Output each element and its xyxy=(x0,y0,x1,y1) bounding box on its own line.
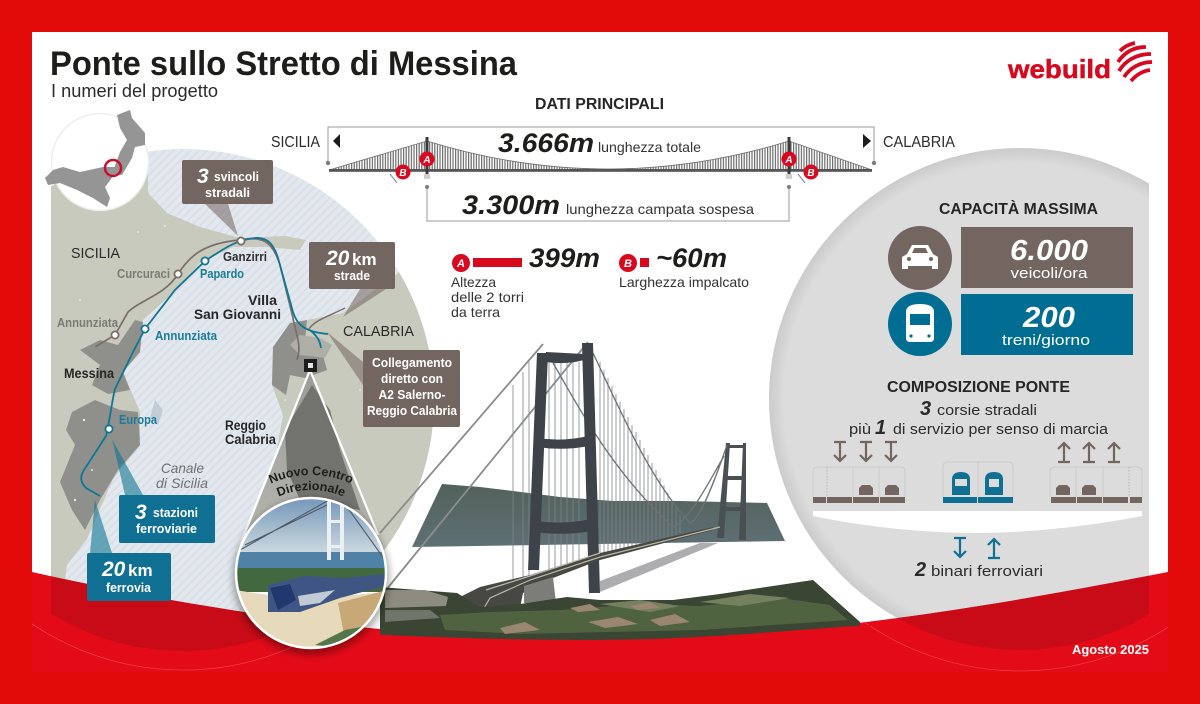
place names: Annunziata xyxy=(155,329,218,343)
stat: vehicles per hour xyxy=(961,227,1133,288)
road junctions xyxy=(111,237,245,339)
hangers xyxy=(513,362,680,588)
callout: Collegamento A2: diretto con xyxy=(381,371,443,386)
callout: 3 svincoli stradali: svincoli xyxy=(214,169,259,184)
callout: Collegamento A2 xyxy=(327,332,460,427)
stat: tower height: Altezza xyxy=(451,274,496,290)
arc label: Nuovo Centro Direzionale: Nuovo Centro xyxy=(268,466,352,484)
deck cross-section xyxy=(813,511,1142,533)
front cables xyxy=(380,342,588,590)
road spur towards A2 xyxy=(308,308,345,330)
icon: train xyxy=(888,292,952,356)
badges: B xyxy=(399,168,407,179)
darkened circles under band xyxy=(32,576,1168,672)
place names: Europa xyxy=(119,413,158,427)
webuild logo: webuild xyxy=(1007,54,1111,84)
text: railway tracks: binari ferroviari xyxy=(931,563,1043,580)
deck shadow on the sea xyxy=(600,543,718,592)
stat: deck width: ~60m xyxy=(656,243,727,273)
label: Calabria on map: CALABRIA xyxy=(343,323,414,340)
stat: trains per day: treni/giorno xyxy=(1002,332,1090,349)
text: lanes description: 3 xyxy=(920,398,931,420)
text: railway tracks: 2 xyxy=(914,559,926,581)
suspended cables and hangers xyxy=(329,141,427,170)
callout: 3 svincoli stradali: stradali xyxy=(205,185,250,200)
icon: car xyxy=(888,226,952,290)
stat: tower height: delle 2 torri xyxy=(451,289,524,305)
subtitle: I numeri del progetto xyxy=(51,81,218,101)
callout: Collegamento A2: A2 Salerno- xyxy=(378,387,446,402)
arrows: road direction down xyxy=(834,442,897,461)
lanes: left carriageway xyxy=(813,467,905,503)
callout: 3 svincoli stradali: 3 xyxy=(197,165,209,188)
lanes: railway xyxy=(943,462,1013,503)
locator map inset xyxy=(45,110,148,210)
label: Canale di Sicilia: di Sicilia xyxy=(156,475,208,491)
place names: Ganzirri xyxy=(223,250,267,264)
main bridge illustration xyxy=(380,342,860,646)
text: lanes description: corsie stradali xyxy=(937,402,1037,419)
callout: 3 stazioni ferroviarie: stazioni xyxy=(153,505,198,520)
label: Sicilia end: SICILIA xyxy=(271,134,320,151)
callout: 20km ferrovia: 20 xyxy=(101,558,126,581)
panel: gray capacity circle xyxy=(769,148,1149,618)
stat: trains per day: 200 xyxy=(1022,302,1075,334)
road route xyxy=(95,239,299,360)
callout: Collegamento A2: Collegamento xyxy=(372,355,452,370)
far hills xyxy=(412,484,785,547)
badges: A xyxy=(784,155,793,166)
arrows: road direction up xyxy=(1058,443,1120,462)
stat: vehicles per hour: 6.000 xyxy=(1010,235,1088,267)
stat: suspended span: lunghezza campata sospesa xyxy=(566,201,754,217)
place names: Reggio xyxy=(225,418,266,433)
text: lanes description: 1 xyxy=(875,417,886,439)
callout: 20km strade: strade xyxy=(334,268,370,283)
bridge deck xyxy=(460,527,713,608)
direction arrows xyxy=(333,134,340,148)
text: railway tracks xyxy=(914,559,1043,581)
main tower xyxy=(528,343,600,593)
stat: tower height: A xyxy=(456,258,465,270)
callout: 20km ferrovia: ferrovia xyxy=(106,580,152,595)
arrows: railway directions xyxy=(954,538,1000,558)
callout: 20km ferrovia: km xyxy=(128,561,153,580)
bridge elevation diagram xyxy=(326,127,876,221)
callout: 3 stazioni ferroviarie xyxy=(112,439,215,543)
stat: tower height: 399m xyxy=(529,243,600,273)
stat: suspended span: 3.300m xyxy=(462,190,560,220)
arc label: Nuovo Centro Direzionale: Direzionale xyxy=(276,480,344,496)
stat: suspended span xyxy=(462,190,754,220)
heading: Capacità massima: CAPACITÀ MASSIMA xyxy=(939,199,1098,218)
heading: Dati principali: DATI PRINCIPALI xyxy=(535,96,664,113)
title: Ponte sullo Stretto di Messina xyxy=(50,45,518,83)
red band repaint over the landscape xyxy=(370,625,870,650)
far tower xyxy=(717,443,746,540)
railway route xyxy=(81,238,328,496)
stat: tower height: da terra xyxy=(451,304,500,320)
place names: Papardo xyxy=(200,267,244,281)
text: lanes description: più xyxy=(849,421,871,438)
marker: Nuovo Centro Direzionale location xyxy=(304,359,317,372)
place names xyxy=(57,250,281,447)
rear cables xyxy=(553,353,727,527)
heading: Composizione ponte: COMPOSIZIONE PONTE xyxy=(887,379,1070,396)
place names: Villa xyxy=(248,292,277,308)
badges: A xyxy=(422,155,431,166)
callout: Collegamento A2: Reggio Calabria xyxy=(367,403,458,418)
arc label: Nuovo Centro Direzionale xyxy=(268,466,352,496)
text: lanes description xyxy=(849,398,1109,439)
place names: Annunziata xyxy=(57,316,119,330)
label: Canale di Sicilia xyxy=(156,460,208,491)
webuild logo xyxy=(1007,43,1152,84)
foreground land xyxy=(380,580,860,646)
stat: tower height xyxy=(451,243,600,320)
stat: total length: lunghezza totale xyxy=(598,139,701,155)
stat: total length: 3.666m xyxy=(498,128,594,158)
callout: 20km strade: km xyxy=(352,250,377,269)
towers xyxy=(426,137,428,178)
callout: 20km strade xyxy=(309,242,395,317)
date: Agosto 2025 xyxy=(1072,642,1149,657)
stat: deck width: B xyxy=(624,258,632,270)
lanes: right carriageway xyxy=(1050,467,1142,503)
stat: deck width: Larghezza impalcato xyxy=(619,274,749,290)
label: Canale di Sicilia: Canale xyxy=(161,460,204,476)
red bottom band xyxy=(32,572,1168,672)
place names: Curcuraci xyxy=(117,267,170,281)
callout: 3 stazioni ferroviarie: 3 xyxy=(135,501,147,524)
callout: 3 svincoli stradali xyxy=(182,160,273,236)
railway stations xyxy=(105,257,209,433)
width markers xyxy=(390,174,805,183)
inset image: Nuovo Centro Direzionale xyxy=(230,495,395,655)
stat: deck width xyxy=(619,243,749,290)
place names: Messina xyxy=(64,366,114,381)
stat: vehicles per hour: veicoli/ora xyxy=(1010,265,1088,282)
label: Sicilia: SICILIA xyxy=(71,245,120,262)
stat: trains per day xyxy=(961,294,1133,355)
badges xyxy=(396,152,818,180)
callout: 20km strade: 20 xyxy=(325,247,350,270)
badges: B xyxy=(807,168,815,179)
panel: map of the strait xyxy=(51,149,432,612)
callout: 3 stazioni ferroviarie: ferroviarie xyxy=(136,521,197,536)
span brackets xyxy=(328,127,874,162)
magnifier cone xyxy=(240,370,382,545)
place names: Calabria xyxy=(225,432,276,447)
callout: 20km ferrovia xyxy=(87,500,171,601)
text: lanes description: di servizio per senso di marcia xyxy=(893,421,1109,438)
label: Calabria end: CALABRIA xyxy=(883,134,955,151)
stat: total length xyxy=(498,128,701,158)
place names: San Giovanni xyxy=(194,306,281,322)
deck xyxy=(329,169,872,172)
